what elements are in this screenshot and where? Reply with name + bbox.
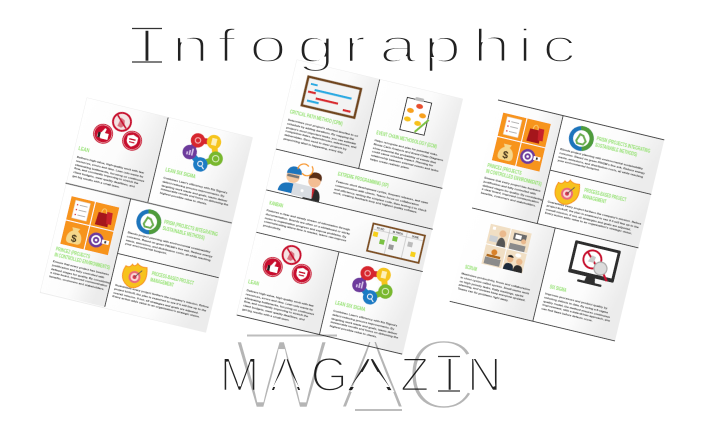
text block: Six Sigma description: Improves processes and product quality by — [545, 291, 608, 310]
heading: Process-based — [582, 188, 627, 210]
section: Lean Six Sigma — [159, 126, 244, 211]
text block: Process-based description: overall mission. If not, all strategies and goals are adjusted. — [545, 207, 632, 231]
icon: process badge — [552, 177, 581, 207]
text block: XP description: communication with clients. Teams focus on collaboration — [335, 183, 419, 207]
text block: Lean description: resources, errors and time. Lean cuts waste by — [245, 292, 314, 312]
heading: Process-based: PROCESS-BASED PROJECT — [584, 188, 627, 204]
text block: Process-based description: project kickoff, the plan is examined to see if it will line up to the — [546, 203, 639, 229]
section: Event Chain Methodology — [370, 90, 456, 177]
text block: Lean Six Sigma description: targeting work waste and goals, teams deliver — [331, 316, 399, 336]
text block: PRINCE2 description: defined stages for quality. By considering — [51, 267, 111, 285]
heading: Critical Path Method: CRITICAL PATH METHOD (CPM) — [289, 109, 343, 128]
heading: Kanban: KANBAN — [269, 201, 284, 210]
text block: Lean Six Sigma description: highest possible value to clients. — [159, 191, 208, 206]
text block: XP description: Features short development cycles, frequent releases, and open — [336, 179, 429, 205]
icon: Lean Six Sigma cycle — [349, 261, 398, 309]
text block: Scrum description: Maximizes productivity, focus and collaboration — [461, 271, 531, 292]
text block: Six Sigma description: improvement, with a data-driven approach, you — [542, 303, 611, 323]
heading: Lean: LEAN — [247, 279, 260, 288]
text block: PRINCE2 description: justification and fully controlled with — [51, 263, 105, 279]
text block: Lean Six Sigma description: targeting work waste and goals, teams deliver — [161, 183, 229, 203]
text block: CPM description: pinpointing what is happening, every day. — [283, 137, 344, 155]
icon: kanban board: IN PROG — [392, 231, 403, 236]
icon: clipboard with risks — [400, 95, 433, 135]
text block: Lean description: flow, and constantly improving to stretch the — [74, 166, 139, 186]
text block: ECM description: could cause schedule impact. Planning for — [372, 149, 434, 168]
text block: Kanban description: documentation. Boards are often on a whiteboard or sticky — [265, 212, 351, 236]
icon: kanban board: DONE — [411, 235, 420, 240]
section: Critical Path Method — [283, 74, 370, 157]
heading: PRiSM: PRISM (PROJECTS INTEGRATING — [596, 136, 651, 155]
section: PRiSM — [556, 119, 653, 183]
heading: PRiSM — [594, 136, 651, 161]
text block: CPM description: Determines your project's shortest timeline to on — [288, 118, 359, 138]
text block: PRINCE2 description: benefits, customers and stakeholders. — [480, 191, 536, 208]
heading: Lean Six Sigma: LEAN SIX SIGMA — [334, 300, 366, 313]
text block: Lean description: get big results with a small team. — [72, 174, 120, 189]
heading: PRiSM — [162, 220, 218, 245]
text block: Kanban description: notes to organization progress and expose problems. By — [264, 216, 347, 239]
text block: Six Sigma description: quality model, the method ensures continuous — [543, 299, 611, 319]
text block: PRiSM description: concerns. Based on green PRiSM's five ask, Reduce energy — [559, 151, 646, 175]
logo: MAGAZIN wordmark — [215, 348, 505, 402]
text block: XP description: work, creating feedback loop and highest quality software. — [332, 190, 418, 214]
text block: CPM description: completion dates, dependencies, milestones, and — [285, 129, 357, 150]
text block: Lean Six Sigma description: defect-reducing process improvements. By — [162, 179, 225, 198]
text block: PRINCE2 description: a clear board, improved communication — [50, 270, 108, 288]
text block: PRINCE2 description: Ensure that every project has business — [53, 259, 110, 277]
icon: PRINCE2 grid — [492, 113, 551, 172]
text block: ECM description: Helps recognize and plan for potential risks. — [374, 138, 439, 157]
text block: Process-based description: Every action adds value to an organization's strategic vision. — [545, 211, 633, 236]
heading: PRINCE2: IN CONTROLLED ENVIRONMENTS) — [54, 252, 111, 271]
heading: Event Chain Methodology: EVENT CHAIN METHODOLOGY (ECM) — [376, 130, 437, 150]
text block: PRINCE2 description: defined stages for quality. By considering — [482, 183, 543, 201]
text block: PRiSM description: concerns. Based on green PRiSM's five ask, Reduce energy — [126, 234, 213, 259]
text block: Scrum description: in short cycles called sprints. Small teams work — [460, 275, 530, 295]
heading: PRiSM: PRISM (PROJECTS INTEGRATING — [163, 220, 218, 238]
text block: Six Sigma description: can find flaws before defects occur. — [541, 307, 593, 323]
section: Kanban — [263, 199, 425, 264]
heading: Process-based — [149, 271, 195, 293]
section: PRiSM — [124, 203, 221, 266]
text block: Process-based description: Guarantees every project furthers the company's mission. Before — [547, 199, 642, 226]
text block: Lean description: client budgets, meet quality deadlines, and — [73, 170, 135, 189]
text block: PRiSM description: waste, emissions, and distribution costs, all while reaching — [125, 238, 211, 262]
text block: Lean description: client budgets, meet quality deadlines, and — [243, 303, 305, 322]
text block: PRINCE2 description: benefits, customers and stakeholders. — [49, 274, 105, 291]
text block: ECM description: helps create realistic plans. — [370, 157, 410, 170]
logo: WAC watermark: WAC — [233, 317, 478, 432]
text block: Scrum description: Teams can fix problems right away. — [457, 287, 509, 303]
logo: MAGAZIN wordmark: MAG — [220, 349, 348, 402]
text block: Lean description: Delivers high-value, high-quality work with few — [77, 155, 145, 175]
text block: PRINCE2 description: a clear board, improved communication — [481, 187, 539, 205]
text block: Lean description: eliminating bottlenecks, focusing on continuous — [244, 296, 315, 316]
text block: Lean description: flow, and constantly improving to stretch the — [244, 300, 309, 319]
title: Infographic — [137, 20, 576, 72]
text block: Kanban description: Features a clear and steady stream of information through — [266, 208, 351, 232]
icon: Lean Six Sigma cycle — [179, 128, 228, 176]
icon: kanban board: TO DO — [376, 227, 385, 232]
icon: lean badges — [261, 239, 317, 286]
text block: Lean Six Sigma description: measurable results and focus on delivering the — [160, 187, 229, 207]
panel: left infographic page — [39, 98, 252, 332]
text block: Lean Six Sigma description: Combines Lean's efficiency with Six Sigma's — [163, 176, 228, 195]
text block: Lean description: eliminating bottlenecks, focusing on continuous — [75, 162, 145, 183]
text block: CPM description: schedule by adding durations. By mapping the — [287, 121, 355, 141]
text block: Lean Six Sigma description: Combines Lean's efficiency with Six Sigma's — [333, 309, 398, 328]
heading: PRINCE2 — [54, 246, 112, 271]
illustration: two developers with laptop — [277, 159, 327, 202]
section: PRINCE2 — [479, 112, 560, 209]
heading: Process-based: MANAGEMENT — [149, 277, 175, 289]
logo: MAGAZIN wordmark: A — [346, 348, 394, 401]
heading: PRINCE2 — [485, 163, 544, 188]
text block: Lean description: resources, errors and time. Lean cuts waste by — [76, 159, 144, 179]
section: Process-based — [545, 176, 648, 237]
text block: PRiSM description: Blends project planning with environmental sustainability — [127, 230, 211, 254]
text block: Process-based description: overall mission. If not, all strategies and goals are adjusted. — [113, 290, 199, 315]
section: Lean — [71, 104, 159, 194]
text block: CPM description: deliverables. Best used to steer projects by — [284, 133, 347, 151]
text block: PRiSM description: your environmental footprint. — [125, 242, 168, 256]
heading: Process-based: MANAGEMENT — [582, 194, 607, 206]
text block: PRINCE2 description: justification and fully controlled with — [482, 179, 537, 196]
heading: Six Sigma: SIX SIGMA — [549, 284, 567, 294]
text block: ECM description: relationship between external events and tasks — [371, 153, 439, 173]
text block: Lean Six Sigma description: defect-reducing process improvements. By — [332, 312, 395, 331]
text block: ECM description: show potential the probability of events that — [372, 146, 436, 164]
section: Process-based — [112, 259, 215, 321]
icon: lean badges — [91, 106, 148, 153]
text block: Process-based description: project kickoff, the plan is examined to see if it will line up to the — [114, 287, 207, 313]
heading: PRINCE2: PRINCE2 (PROJECTS — [487, 163, 522, 177]
heading: PRiSM: SUSTAINABLE METHODS) — [594, 143, 638, 158]
section: Six Sigma — [541, 236, 627, 327]
icon: PRINCE2 grid — [60, 196, 119, 255]
heading: PRiSM: SUSTAINABLE METHODS) — [162, 226, 205, 242]
icon: PRiSM recycle — [566, 121, 600, 154]
icon: process badge — [120, 261, 149, 290]
section: PRINCE2 — [48, 195, 128, 293]
heading: Scrum: SCRUM — [464, 265, 477, 273]
text block: Lean description: get big results with a small team. — [242, 307, 290, 322]
heading: Lean Six Sigma: LEAN SIX SIGMA — [165, 167, 196, 180]
text block: PRiSM description: waste, emissions, and distribution costs, all while reaching — [557, 154, 644, 179]
text block: PRiSM description: your environmental footprint. — [557, 158, 600, 172]
logo: MAGAZIN wordmark: ZIN — [400, 349, 502, 402]
icon: PRiSM recycle — [134, 204, 167, 238]
heading: PRINCE2: IN CONTROLLED ENVIRONMENTS) — [485, 169, 542, 188]
heading: PRINCE2: PRINCE2 (PROJECTS — [55, 246, 91, 261]
heading: Lean: LEAN — [78, 146, 90, 154]
text block: PRINCE2 description: Ensure that every project has business — [484, 176, 541, 193]
icon: Gantt chart board — [302, 77, 361, 118]
icon: monitor with magnifier — [566, 240, 621, 290]
text block: Kanban description: productivity. — [263, 223, 282, 231]
illustration: scrum scenes — [481, 224, 532, 273]
text block: Lean description: Delivers high-value, high-quality work with few — [246, 288, 315, 308]
section: Lean (repeat) — [241, 237, 329, 327]
text block: Process-based description: Every action adds value to an organization's strategic vision. — [112, 294, 200, 319]
text block: Scrum description: planning, and reviews keep everyone updated. — [458, 283, 526, 303]
text block: Six Sigma description: reducing defects in data. By using a 6-sigma — [544, 295, 609, 314]
heading: Extreme Programming: EXTREME PROGRAMMING (XP) — [337, 172, 389, 189]
section: Lean Six Sigma (repeat) — [329, 259, 413, 344]
text block: ECM description: Monte Carlo Analysis and Event Chain Diagrams — [373, 142, 444, 162]
heading: Process-based: PROCESS-BASED PROJECT — [151, 271, 195, 287]
section: Extreme Programming — [277, 159, 431, 226]
text block: Lean Six Sigma description: highest possible value to clients. — [329, 324, 378, 339]
section: Scrum — [457, 220, 543, 307]
text block: Scrum description: on high-priority tasks. Daily meetings, sprint — [459, 279, 524, 298]
text block: XP description: and efficiency, writing the simplest code, then testing it to check — [334, 187, 427, 213]
text block: CPM description: project's most important tasks, you can estimate — [286, 125, 357, 146]
text block: Process-based description: Guarantees every project furthers the company's mission. Before — [115, 283, 209, 309]
text block: PRiSM description: Blends project planning with environmental sustainability — [560, 147, 644, 171]
text block: Lean Six Sigma description: measurable results and focus on delivering the — [330, 320, 399, 340]
panel: right infographic page — [449, 100, 664, 342]
icon: kanban board — [367, 223, 425, 263]
panel: middle infographic page — [237, 60, 463, 354]
text block: Kanban description: communicating where time is wasted, teams can improve — [264, 219, 347, 243]
